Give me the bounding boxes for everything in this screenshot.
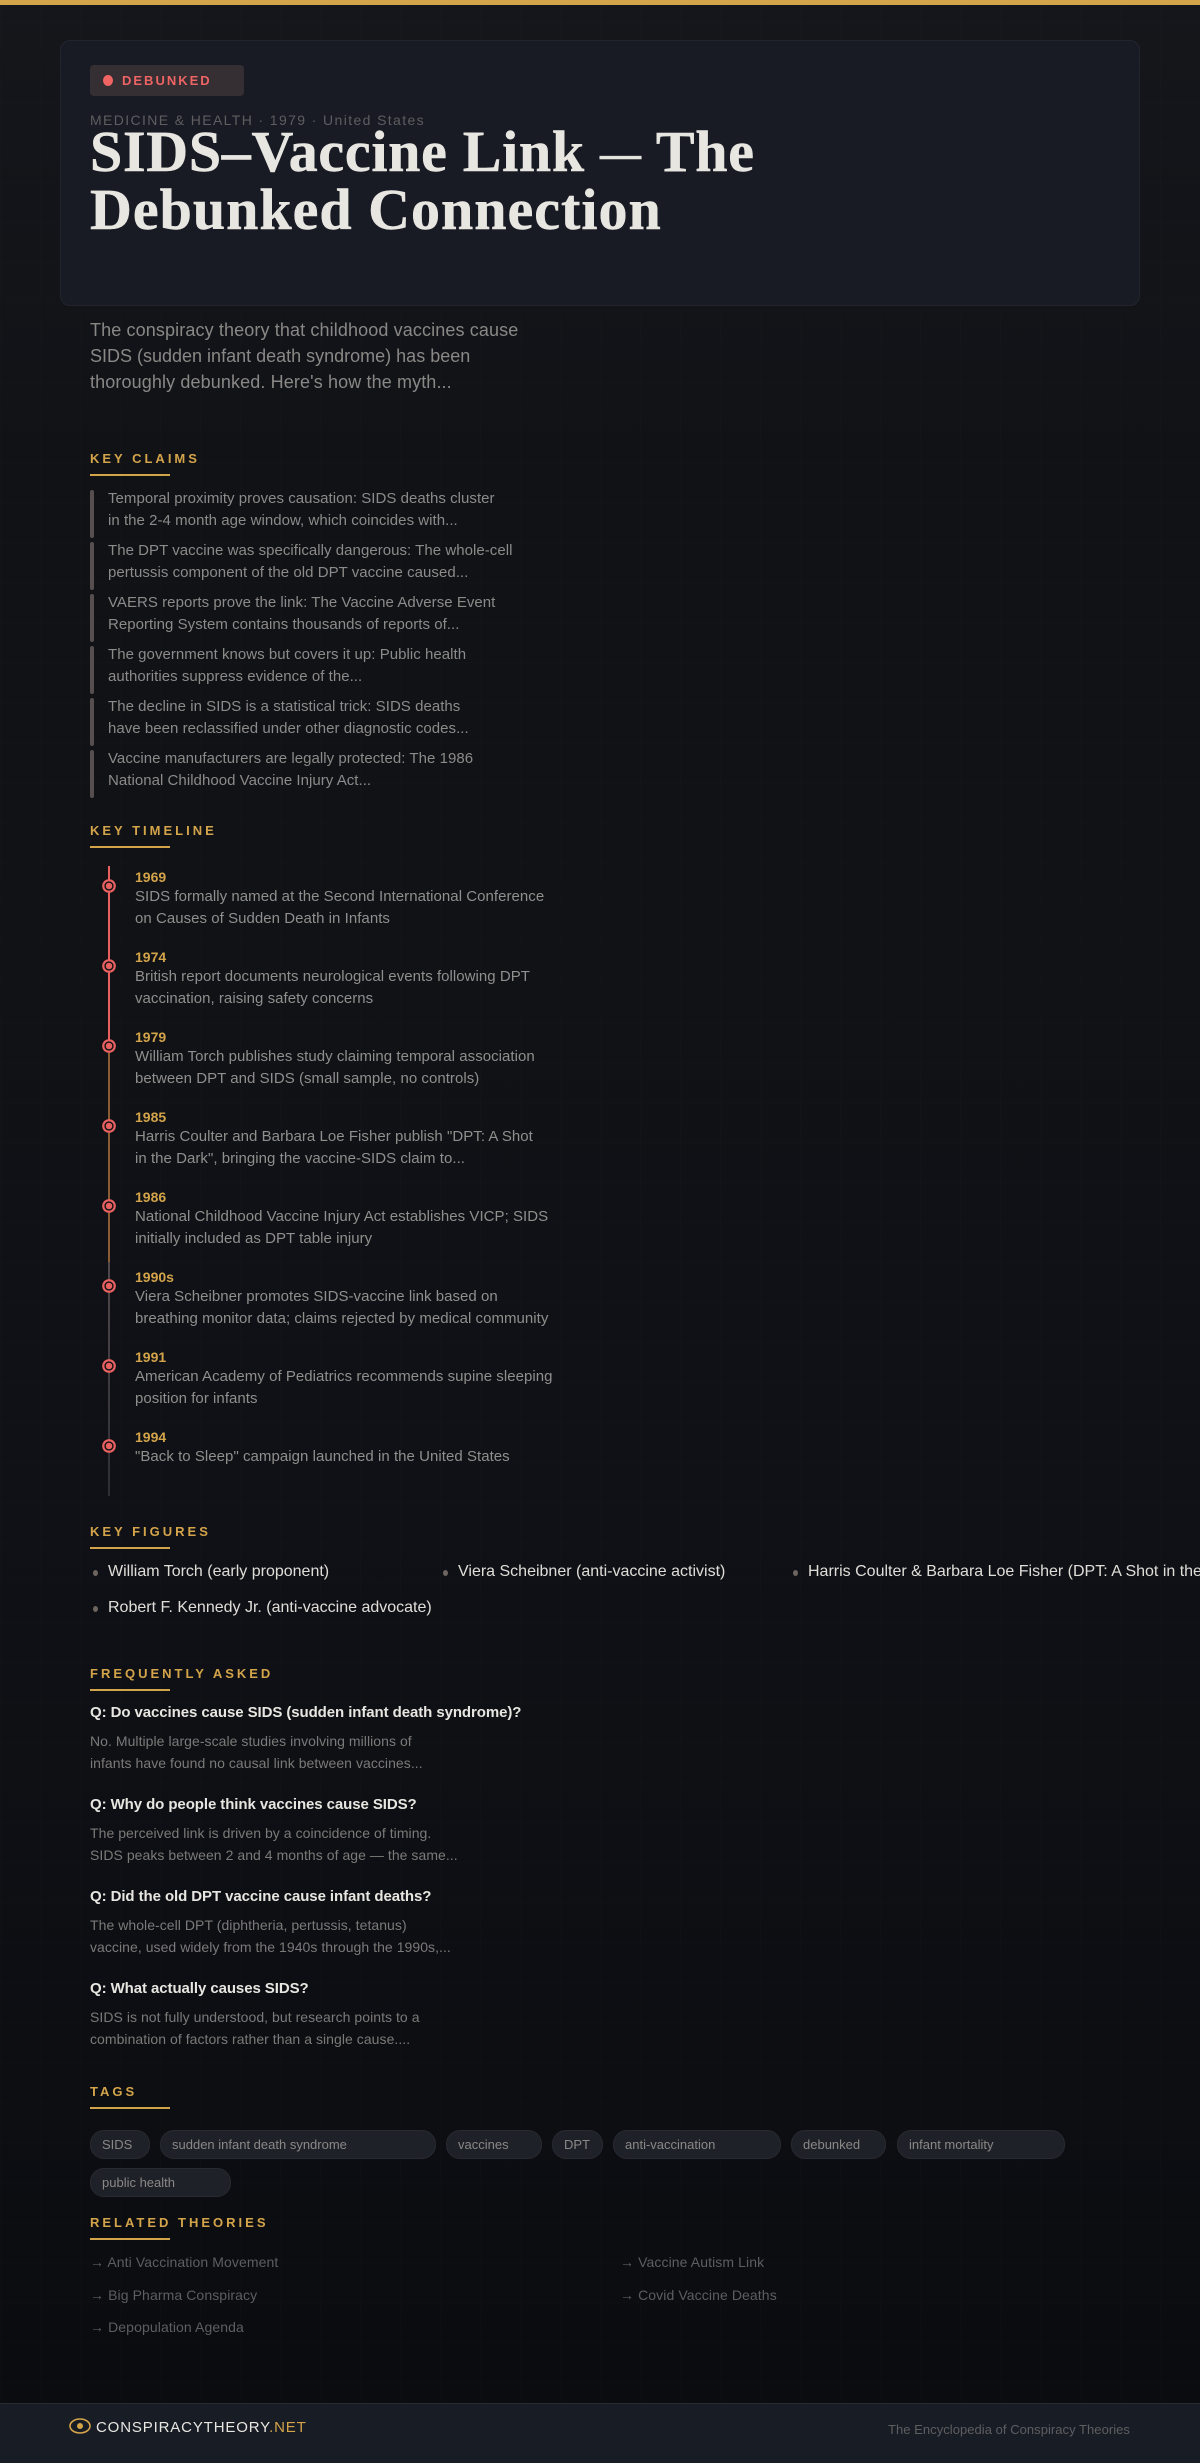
intro description: The conspiracy theory that childhood vaccines cause (90, 320, 518, 340)
figure: William Torch: William Torch (early proponent) (108, 1563, 329, 1580)
event 1990s: breathing monitor data; claims rejected by medical community (135, 1310, 548, 1327)
FAQ item 3: vaccine, used widely from the 1940s through the 1990s,... (90, 1939, 451, 1955)
event 1990s: 1990s (135, 1269, 174, 1285)
FAQ item 3: Q: Did the old DPT vaccine cause infant deaths? (90, 1888, 431, 1905)
event 1969: on Causes of Sudden Death in Infants (135, 910, 390, 927)
panel: key claims list (90, 490, 512, 798)
tag: DPT (552, 2130, 603, 2159)
claim 2: pertussis component of the old DPT vaccine caused... (108, 564, 468, 581)
event 1991: American Academy of Pediatrics recommends supine sleeping (135, 1368, 552, 1385)
claim 4: authorities suppress evidence of the... (108, 668, 362, 685)
title: Debunked Connection (90, 177, 662, 242)
claim 1 (90, 490, 495, 538)
claim 5: The decline in SIDS is a statistical trick: SIDS deaths (108, 698, 460, 715)
category and date meta line: MEDICINE & HEALTH · 1979 · United States (90, 112, 425, 128)
event 1986: initially included as DPT table injury (135, 1230, 372, 1247)
tag: infant mortality: infant mortality (909, 2137, 994, 2152)
tag: anti-vaccination (613, 2130, 781, 2159)
panel: related theories links (90, 2254, 777, 2335)
event 1974 (102, 949, 530, 1007)
event 1974: vaccination, raising safety concerns (135, 990, 373, 1007)
claim 3: VAERS reports prove the link: The Vaccine Adverse Event (108, 594, 495, 611)
intro description: SIDS (sudden infant death syndrome) has been (90, 346, 470, 366)
tag: DPT: DPT (564, 2137, 590, 2152)
FAQ item 2: SIDS peaks between 2 and 4 months of age — the same... (90, 1847, 458, 1863)
tag: sudden infant death syndrome (160, 2130, 436, 2159)
event 1994: 1994 (135, 1429, 166, 1445)
event 1969: SIDS formally named at the Second International Conference (135, 888, 544, 905)
event 1986: National Childhood Vaccine Injury Act establishes VICP; SIDS (135, 1208, 548, 1225)
icon: status dot (103, 75, 113, 86)
FAQ item 2 (90, 1796, 458, 1863)
claim 1: in the 2-4 month age window, which coincides with... (108, 512, 458, 529)
section heading: key figures: KEY FIGURES (90, 1524, 211, 1539)
panel: hero header (60, 40, 1140, 306)
section heading: tags: TAGS (90, 2084, 137, 2099)
claim 6 (90, 750, 473, 798)
tag: debunked (791, 2130, 886, 2159)
event 1979: between DPT and SIDS (small sample, no controls) (135, 1070, 479, 1087)
FAQ item 4: Q: What actually causes SIDS? (90, 1980, 309, 1997)
FAQ item 1: Q: Do vaccines cause SIDS (sudden infant death syndrome)? (90, 1704, 521, 1721)
icon: eye logo (69, 2418, 91, 2434)
link: Covid Vaccine Deaths: → Covid Vaccine Deaths (620, 2287, 777, 2303)
claim 2: The DPT vaccine was specifically dangerous: The whole-cell (108, 542, 512, 559)
tag: debunked: debunked (803, 2137, 860, 2152)
badge: debunked status (90, 65, 244, 96)
badge label: DEBUNKED (122, 73, 212, 88)
event 1986 (102, 1189, 548, 1247)
FAQ item 4 (90, 1980, 420, 2047)
FAQ item 3 (90, 1888, 451, 1955)
footer wordmark: CONSPIRACYTHEORY.NET (96, 2419, 307, 2436)
FAQ item 4: SIDS is not fully understood, but research points to a (90, 2009, 420, 2025)
top accent bar (0, 0, 1200, 5)
claim 3: Reporting System contains thousands of reports of... (108, 616, 459, 633)
section heading: key timeline: KEY TIMELINE (90, 823, 217, 838)
claim 1: Temporal proximity proves causation: SIDS deaths cluster (108, 490, 495, 507)
tag: vaccines: vaccines (458, 2137, 509, 2152)
figure: Robert F. Kennedy Jr.: Robert F. Kennedy Jr. (anti-vaccine advocate) (108, 1599, 432, 1616)
section heading: key claims: KEY CLAIMS (90, 451, 200, 466)
claim 5 (90, 698, 469, 746)
event 1985: Harris Coulter and Barbara Loe Fisher publish "DPT: A Shot (135, 1128, 533, 1145)
event 1979: William Torch publishes study claiming temporal association (135, 1048, 535, 1065)
event 1994: "Back to Sleep" campaign launched in the United States (135, 1448, 510, 1465)
claim 3 (90, 594, 496, 642)
event 1986: 1986 (135, 1189, 166, 1205)
event 1979: 1979 (135, 1029, 166, 1045)
tag: anti-vaccination: anti-vaccination (625, 2137, 715, 2152)
panel: FAQ list (90, 1704, 521, 2047)
claim 5: have been reclassified under other diagnostic codes... (108, 720, 469, 737)
event 1990s: Viera Scheibner promotes SIDS-vaccine link based on (135, 1288, 498, 1305)
tag: infant mortality (897, 2130, 1065, 2159)
claim 6: National Childhood Vaccine Injury Act... (108, 772, 371, 789)
chart: key timeline (102, 866, 552, 1496)
figure: Viera Scheibner: Viera Scheibner (anti-vaccine activist) (458, 1563, 725, 1580)
intro description (90, 320, 518, 392)
panel: key figures list (93, 1563, 1200, 1616)
event 1974: 1974 (135, 949, 166, 965)
panel: footer (0, 2403, 1200, 2463)
event 1994 (102, 1429, 510, 1465)
link: Anti Vaccination Movement: → Anti Vaccination Movement (90, 2254, 278, 2270)
tag: public health: public health (102, 2175, 175, 2190)
section heading: frequently asked: FREQUENTLY ASKED (90, 1666, 273, 1681)
FAQ item 1 (90, 1704, 521, 1771)
title: SIDS–Vaccine Link — The (90, 119, 755, 184)
event 1991: 1991 (135, 1349, 166, 1365)
link: Depopulation Agenda: → Depopulation Agenda (90, 2319, 244, 2335)
FAQ item 3: The whole-cell DPT (diphtheria, pertussis, tetanus) (90, 1917, 407, 1933)
event 1979 (102, 1029, 535, 1087)
FAQ item 1: infants have found no causal link between vaccines... (90, 1755, 423, 1771)
title (90, 119, 755, 242)
section heading: related theories: RELATED THEORIES (90, 2215, 268, 2230)
intro description: thoroughly debunked. Here's how the myth... (90, 372, 452, 392)
panel: tag pills (90, 2130, 1065, 2197)
link: Big Pharma Conspiracy: → Big Pharma Conspiracy (90, 2287, 257, 2303)
claim 4 (90, 646, 466, 694)
footer tagline: The Encyclopedia of Conspiracy Theories (888, 2422, 1130, 2437)
tag: sudden infant death syndrome: sudden infant death syndrome (172, 2137, 347, 2152)
FAQ item 4: combination of factors rather than a single cause.... (90, 2031, 410, 2047)
event 1990s (102, 1269, 548, 1327)
FAQ item 2: The perceived link is driven by a coincidence of timing. (90, 1825, 431, 1841)
tag: vaccines (446, 2130, 542, 2159)
link: Vaccine Autism Link: → Vaccine Autism Link (620, 2254, 764, 2270)
event 1985: 1985 (135, 1109, 166, 1125)
event 1969 (102, 869, 544, 927)
timeline spine (108, 866, 110, 1496)
FAQ item 1: No. Multiple large-scale studies involving millions of (90, 1733, 412, 1749)
event 1974: British report documents neurological events following DPT (135, 968, 530, 985)
event 1985 (102, 1109, 533, 1167)
claim 2 (90, 542, 512, 590)
FAQ item 2: Q: Why do people think vaccines cause SIDS? (90, 1796, 417, 1813)
event 1985: in the Dark", bringing the vaccine-SIDS claim to... (135, 1150, 465, 1167)
tag: SIDS (90, 2130, 150, 2159)
event 1991: position for infants (135, 1390, 258, 1407)
tag: public health (90, 2168, 231, 2197)
event 1991 (102, 1349, 552, 1407)
event 1969: 1969 (135, 869, 166, 885)
claim 6: Vaccine manufacturers are legally protected: The 1986 (108, 750, 473, 767)
claim 4: The government knows but covers it up: Public health (108, 646, 466, 663)
tag: SIDS: SIDS (102, 2137, 132, 2152)
